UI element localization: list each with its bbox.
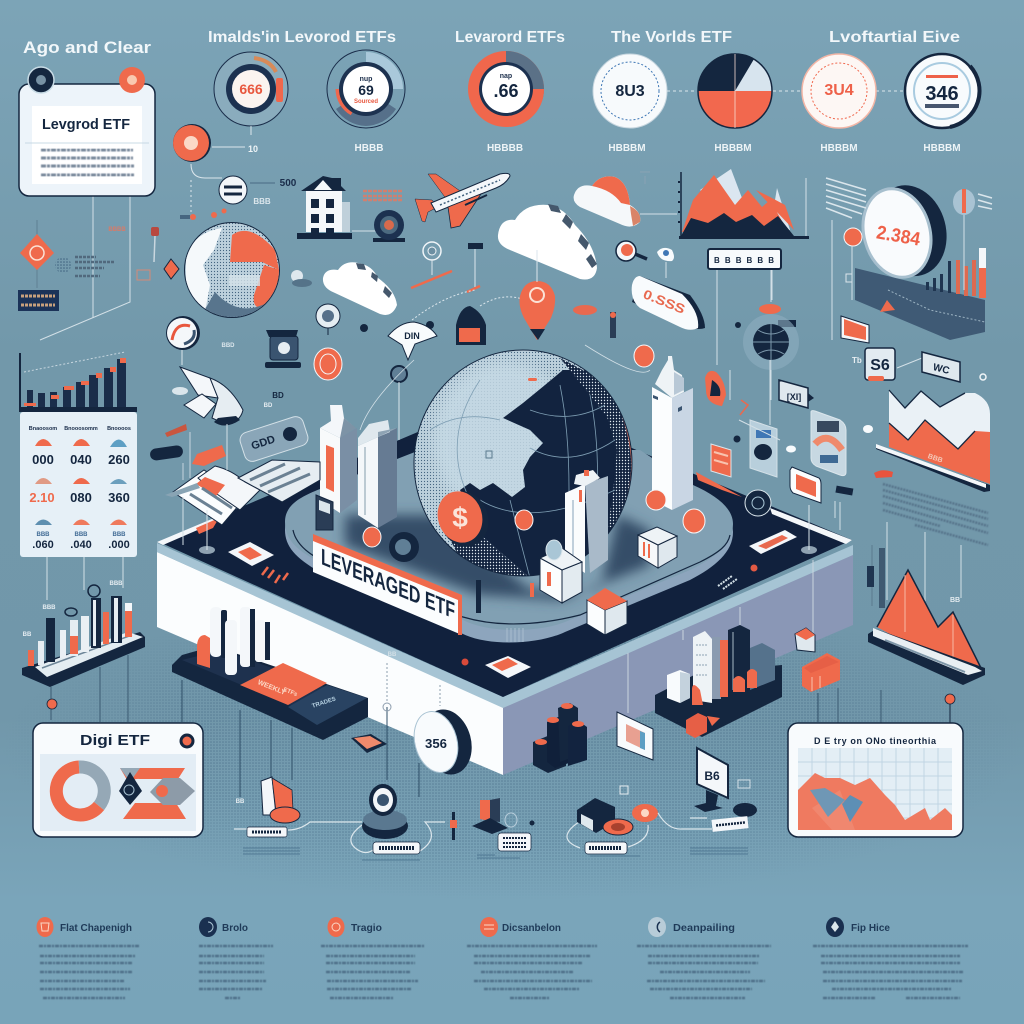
- label tag 5: [658, 803, 757, 832]
- pie chart: [698, 54, 772, 154]
- card title: Levgrod ETF: [42, 116, 130, 133]
- gauge 1: 666: [239, 81, 263, 97]
- ground stems: [182, 680, 818, 797]
- gauge 5: 3U4: [824, 82, 854, 99]
- bars: [27, 359, 126, 407]
- pins and dashes near left cloud: [411, 242, 530, 320]
- gauge 6: 346: [925, 83, 959, 105]
- black deck: [159, 395, 852, 697]
- table icons: [35, 439, 127, 525]
- grid: [798, 748, 952, 830]
- icon: orange node with connector: 10: [248, 144, 258, 154]
- standing card: [617, 712, 653, 760]
- coin badge 356: [351, 703, 479, 780]
- large pill label: 0.SSS: [641, 286, 688, 317]
- pie chart: HBBBM: [714, 143, 752, 154]
- panel: table: [20, 412, 137, 557]
- panel: mountain grid chart: [788, 723, 963, 837]
- icon: book and orange drum: [236, 777, 300, 823]
- chip GDD: GDD: [250, 433, 277, 452]
- diamonds: [810, 788, 845, 817]
- icon: battery and discs: [567, 786, 658, 848]
- bar tips: [24, 358, 126, 406]
- dashed connector: [667, 90, 905, 92]
- panel: table: Bnooosomm: [64, 426, 98, 432]
- left bar chart and table: [19, 352, 137, 600]
- column 6: Fip Hice: [851, 923, 890, 934]
- column 5: Deanpailing: [673, 923, 735, 934]
- platform: [157, 395, 853, 775]
- icon: monitor: B6: [704, 769, 720, 783]
- dotted foot: [450, 538, 527, 576]
- column 5: [637, 917, 771, 998]
- tower 3: tall right: [652, 356, 693, 510]
- vertical tag: BB: [950, 597, 960, 604]
- dark continent: [460, 370, 617, 576]
- gauge 6: [905, 54, 980, 154]
- tray with bars: WEEKLY: [257, 679, 287, 697]
- orange-navy crest and cards: [705, 360, 873, 530]
- area chart: white and orange: [876, 390, 990, 492]
- cloud: orange top: [574, 172, 677, 227]
- card: blue: [750, 420, 777, 477]
- chip GDD: BD: [264, 403, 273, 409]
- gauge 2: Sourced: [354, 99, 378, 105]
- gauge 3: nap: [500, 73, 512, 80]
- dotted right rim: [560, 358, 632, 528]
- icon: orange node with connector: [173, 124, 258, 213]
- bottom row flow icons: [234, 748, 757, 860]
- icon: badge: [180, 734, 194, 748]
- small chip: [835, 486, 853, 530]
- gauge 4: [593, 54, 667, 154]
- tray bars: [28, 596, 132, 666]
- icon: small dial with label 500: [180, 176, 297, 220]
- coin: dollar: [431, 485, 495, 553]
- speech box: [XI]: [787, 392, 801, 402]
- icon: round red medallion: [166, 316, 235, 365]
- tower 4: center: [565, 470, 608, 573]
- icon: machine and badge: [265, 270, 368, 368]
- column 2: Brolo: [222, 923, 248, 934]
- card body lines: [41, 150, 134, 175]
- chip GDD: [238, 391, 310, 463]
- label tag 2: [373, 842, 420, 854]
- tray with bars: [172, 607, 368, 740]
- header row: [23, 29, 960, 57]
- lens and navy dials: [360, 345, 771, 562]
- column 2: [199, 917, 273, 998]
- boxes on inner platform: [476, 527, 677, 635]
- triangle chart: [868, 570, 985, 685]
- globe: upper left: [184, 222, 280, 318]
- hexagon flow graphic: [119, 768, 195, 819]
- speech box: [779, 380, 814, 408]
- icon: small dial with label 500: 500: [280, 178, 297, 189]
- bottom section: 6 columns: [36, 917, 968, 998]
- column 3: Tragio: [351, 923, 382, 934]
- column 1: Flat Chapenigh: [60, 923, 132, 934]
- tower 2: [358, 420, 397, 528]
- icon: webcam: [373, 210, 405, 242]
- column 1: [36, 917, 140, 998]
- label box under mountain chart: [708, 249, 781, 365]
- card title: D E try on ONo tineorthia: [814, 736, 937, 746]
- left white face: [157, 552, 503, 775]
- speech bubble WC: WC: [932, 362, 951, 377]
- tray with bars: ETFs: [282, 687, 299, 698]
- tray columns: [197, 607, 270, 675]
- icon: airplane: [415, 173, 510, 228]
- icon: orange badge: [119, 67, 145, 93]
- heading: column 1: Imalds'in Levorod ETFs: [208, 29, 396, 46]
- gauge 6: HBBBM: [923, 143, 961, 154]
- gauge 5: HBBBM: [820, 143, 858, 154]
- icon: navy badge: [28, 67, 54, 93]
- gauge 2: 69: [358, 82, 374, 98]
- orange lock tag: [426, 305, 616, 345]
- column 3: [321, 917, 424, 998]
- icon: webcam lens: [362, 784, 408, 839]
- shaded dome foot: [345, 515, 650, 600]
- panel: table: BBB: [36, 532, 50, 538]
- tray tags: BB: [23, 632, 32, 638]
- rim line: [293, 530, 730, 624]
- gauge 3: HBBBB: [487, 143, 523, 154]
- underline strokes: [243, 848, 748, 860]
- small navy data box: [18, 290, 59, 311]
- speech bubble WC: [922, 352, 986, 382]
- building tray: [655, 625, 782, 738]
- icon: magnifier and blob: [616, 241, 674, 278]
- panel: table: .000: [108, 539, 130, 551]
- orange pin above left card: [47, 699, 57, 709]
- icon: round red medallion: BBD: [222, 343, 235, 349]
- gauge 4: HBBBM: [608, 143, 646, 154]
- banner: LEVERAGED ETF: LEVERAGED ETF: [321, 544, 455, 625]
- panel: table: BBB: [112, 532, 126, 538]
- gauge 3: .66: [493, 81, 519, 101]
- icon: orange diamond: [20, 220, 54, 288]
- heading: column 3: The Vorlds ETF: [611, 29, 732, 46]
- speech bubble S6: S6: [870, 357, 890, 374]
- small coins: [314, 345, 705, 547]
- text block with red marker: [874, 470, 988, 545]
- panel: Digi ETF: [33, 723, 203, 837]
- card: orange small: [711, 444, 731, 477]
- column 4: Dicsanbelon: [502, 923, 561, 934]
- area chart: white and orange: BBB: [927, 453, 943, 464]
- red marker icons: BBBB: [108, 227, 126, 233]
- vertical tag: [867, 548, 960, 608]
- icon: small dial with label 500: BBB: [253, 197, 271, 206]
- label tag 3: [498, 833, 531, 851]
- gauge 4: 8U3: [615, 83, 645, 100]
- coin: dollar: $: [452, 502, 468, 533]
- panel: table: Bnoooos: [107, 426, 131, 432]
- dome globe: [414, 350, 640, 578]
- speech bubble DIN: DIN: [404, 331, 420, 341]
- coin badge 356: 356: [425, 736, 447, 751]
- gauge 3: [468, 51, 544, 154]
- panel: Levgrod ETF card: [19, 67, 155, 340]
- speech bubble DIN: [388, 322, 437, 360]
- tags left of book: [149, 424, 226, 545]
- panel: table: 360: [108, 490, 130, 505]
- panel: table: 040: [70, 452, 92, 467]
- heading: main: Ago and Clear: [23, 38, 151, 57]
- dark device by tower: [316, 495, 333, 530]
- soft highlight: [427, 355, 554, 497]
- red boxes: [795, 628, 881, 723]
- gauge 2: [327, 50, 405, 154]
- card: arc: [811, 411, 846, 476]
- deck items: [199, 505, 817, 678]
- small globe icon: [735, 314, 799, 370]
- red pin above right card: [945, 694, 955, 723]
- left bar tray: [22, 581, 145, 722]
- round inner platform: [285, 450, 733, 642]
- heading: column 4: Lvoftartial Eive: [829, 29, 960, 46]
- panel: table: 2.10: [29, 490, 55, 505]
- light top edge: [157, 543, 853, 708]
- icon: book and orange drum: BB: [236, 799, 245, 805]
- grid lines: [430, 380, 615, 578]
- large pill label: [632, 276, 705, 330]
- red marker icons: [108, 227, 179, 280]
- white box with orange card near dark plane: [841, 316, 869, 343]
- tray tags: BBB: [110, 581, 123, 587]
- right lavender face: [503, 555, 853, 775]
- fingerprint and text note: [55, 257, 114, 276]
- gauge 5: [802, 54, 876, 154]
- label box under mountain chart: BBBBBB: [714, 256, 774, 265]
- deck items: BB: [388, 652, 397, 658]
- label tag 4: [585, 842, 627, 854]
- panel: table: 080: [70, 490, 92, 505]
- large number badge: 2.384: [875, 222, 922, 251]
- icon: orange book stand: [450, 798, 534, 840]
- tower 1: [320, 405, 357, 513]
- tray tags: [23, 581, 123, 638]
- panel: table: Bnaoosom: [29, 426, 57, 432]
- chip GDD: BD: [272, 391, 284, 400]
- heading: column 2: Levarord ETFs: [455, 29, 565, 46]
- map pin: [520, 250, 555, 340]
- speech bubble S6: Tb: [852, 356, 862, 365]
- speech bubble S6: [852, 348, 922, 381]
- dark blocks: [533, 703, 587, 773]
- panel: table: BBB: [74, 532, 88, 538]
- tray with bars: TRADES: [311, 696, 337, 710]
- platform right edge lines: [730, 270, 796, 400]
- open book: [173, 460, 320, 525]
- label tag 1: [247, 827, 287, 837]
- dotted ground texture: [60, 618, 970, 886]
- rim side: [285, 455, 733, 642]
- column 4: [467, 917, 597, 998]
- card: orange large: [790, 467, 821, 503]
- top surface: [285, 450, 733, 630]
- panel: table: .040: [70, 539, 92, 551]
- tray tags: BBB: [42, 605, 56, 611]
- icon: monitor: [694, 748, 750, 812]
- card title: Digi ETF: [80, 732, 150, 749]
- large number badge: [826, 177, 992, 340]
- mountain chart: [678, 169, 809, 239]
- icon: house: [297, 176, 403, 239]
- column 6: [813, 917, 968, 998]
- banner: LEVERAGED ETF: [313, 534, 462, 635]
- panel: table: .060: [32, 539, 54, 551]
- cloud: left: [323, 262, 397, 315]
- stems and side label: [872, 522, 961, 608]
- panel: dark chart plane with bars: [846, 248, 986, 340]
- donut chart: [56, 767, 104, 815]
- gauge 1: [214, 52, 288, 135]
- panel: table: 000: [32, 452, 54, 467]
- flow line: [234, 822, 445, 852]
- cloud: large: [498, 204, 597, 280]
- icon: origami bird: [172, 367, 243, 470]
- panel: table: 260: [108, 452, 130, 467]
- gauge 2: HBBB: [355, 143, 383, 154]
- gauge 2: nup: [360, 76, 372, 83]
